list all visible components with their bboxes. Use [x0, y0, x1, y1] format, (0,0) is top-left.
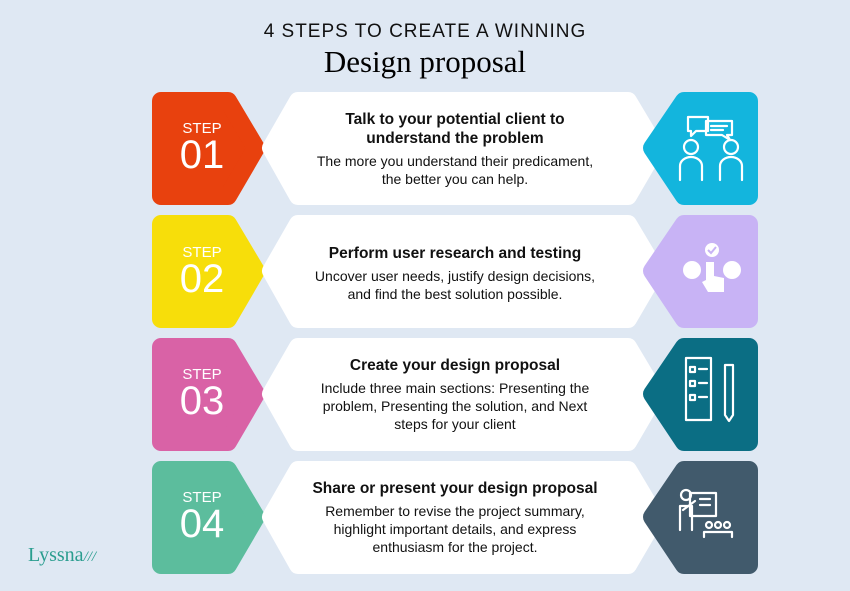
step 2 text: and find the best solution possible.	[348, 286, 562, 302]
step 3 text	[321, 357, 589, 432]
title: 4 STEPS TO CREATE A WINNING	[264, 21, 586, 42]
step 2 label: STEP	[182, 244, 222, 261]
step 2 text: Perform user research and testing	[329, 245, 581, 262]
step 3 label: STEP	[182, 366, 222, 383]
step 1 text	[317, 111, 593, 187]
step 4 label: 04	[180, 502, 224, 546]
step 4 text: Remember to revise the project summary,	[325, 503, 585, 519]
title: Design proposal	[324, 44, 526, 79]
step 2 text	[315, 245, 595, 302]
step 4 label: STEP	[182, 489, 222, 506]
step 3 text: steps for your client	[394, 416, 516, 432]
step 1 label: STEP	[182, 120, 222, 137]
step 4 text	[312, 480, 598, 555]
logo: Lyssna///	[28, 544, 96, 566]
step 3 text: Create your design proposal	[350, 357, 560, 374]
step 4 text: highlight important details, and express	[334, 521, 576, 537]
step 2 text: Uncover user needs, justify design decisions,	[315, 268, 595, 284]
step 1 text: the better you can help.	[382, 171, 528, 187]
step 1 text: Talk to your potential client to	[345, 111, 565, 128]
step 3 text: Include three main sections: Presenting the	[321, 380, 589, 396]
step 4 text: Share or present your design proposal	[312, 480, 598, 497]
step 1 text: understand the problem	[366, 130, 544, 147]
step 3 text: problem, Presenting the solution, and Next	[323, 398, 587, 414]
step 4 text: enthusiasm for the project.	[372, 539, 537, 555]
title	[264, 21, 586, 79]
step 3 label: 03	[180, 379, 224, 423]
step 1 text: The more you understand their predicament,	[317, 153, 593, 169]
step 2 label: 02	[180, 257, 224, 301]
step 1 label: 01	[180, 133, 224, 177]
